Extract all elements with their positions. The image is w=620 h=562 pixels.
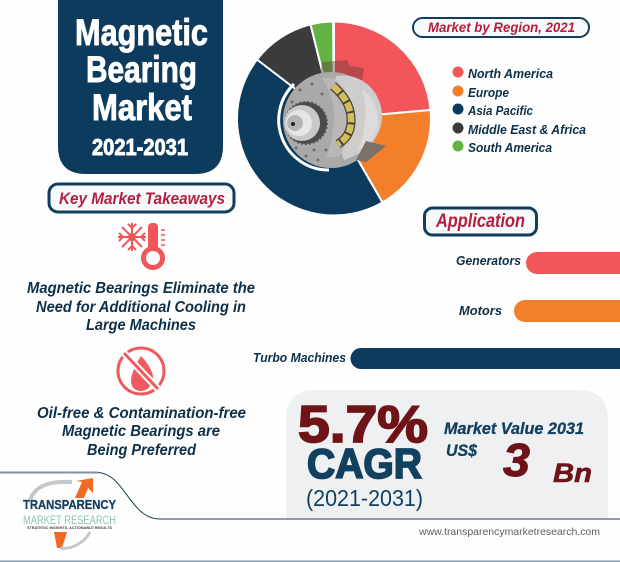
text: oil-free takeaway: Oil-free & Contamination-free — [37, 405, 246, 422]
heading: application: Application — [435, 211, 525, 232]
text: cooling takeaway: Large Machines — [86, 317, 196, 334]
title panel: 2021-2031 — [92, 134, 188, 160]
donut chart: market by region — [237, 22, 431, 215]
panel: cagr and market value: CAGR — [307, 440, 422, 487]
icon: snowflake and thermometer — [118, 223, 165, 268]
panel: cagr and market value: 5.7% — [298, 396, 428, 454]
bar chart: application: Turbo Machines — [253, 350, 346, 365]
legend — [452, 66, 586, 155]
text: cooling takeaway — [27, 280, 255, 334]
title panel: Magnetic — [75, 12, 208, 53]
website url: www.transparencymarketresearch.com — [418, 526, 600, 538]
text: cooling takeaway: Need for Additional Cooling in — [36, 299, 246, 316]
panel: cagr and market value: US$ — [446, 442, 478, 460]
title panel: Market — [92, 87, 192, 128]
text: oil-free takeaway — [37, 405, 246, 459]
logo: transparency market research: TRANSPARENCY — [23, 497, 116, 512]
heading: key market takeaways: Key Market Takeaways — [59, 189, 225, 208]
text: oil-free takeaway: Being Preferred — [87, 442, 197, 459]
panel: cagr and market value: Bn — [553, 458, 592, 488]
bar chart: application: Motors — [459, 303, 502, 318]
panel: cagr and market value: Market Value 2031 — [444, 420, 584, 438]
panel: cagr and market value: 3 — [503, 434, 530, 486]
heading: key market takeaways — [49, 184, 234, 212]
legend: Europe — [468, 85, 509, 100]
bar chart: application: Generators — [456, 253, 521, 268]
title panel: Bearing — [86, 49, 197, 90]
logo: transparency market research: MARKET RESEARCH — [23, 515, 116, 527]
logo: transparency market research — [23, 478, 116, 548]
panel: cagr and market value: (2021-2031) — [306, 485, 423, 511]
legend: South America — [468, 140, 552, 155]
text: cooling takeaway: Magnetic Bearings Eliminate the — [27, 280, 255, 297]
legend: North America — [468, 66, 553, 81]
panel: cagr and market value — [286, 390, 608, 519]
text: oil-free takeaway: Magnetic Bearings are — [62, 423, 220, 440]
legend: Asia Pacific — [467, 103, 534, 118]
heading: market by region: Market by Region, 2021 — [428, 19, 575, 35]
icon: no oil drop — [118, 348, 164, 394]
legend: Middle East & Africa — [468, 122, 586, 137]
heading: application — [424, 208, 536, 235]
title panel — [58, 0, 223, 174]
bar chart: application — [253, 252, 620, 369]
logo: transparency market research: STRATEGIC INSIGHTS, ACTIONABLE RESULTS — [27, 526, 112, 530]
bearing illustration — [279, 60, 386, 170]
